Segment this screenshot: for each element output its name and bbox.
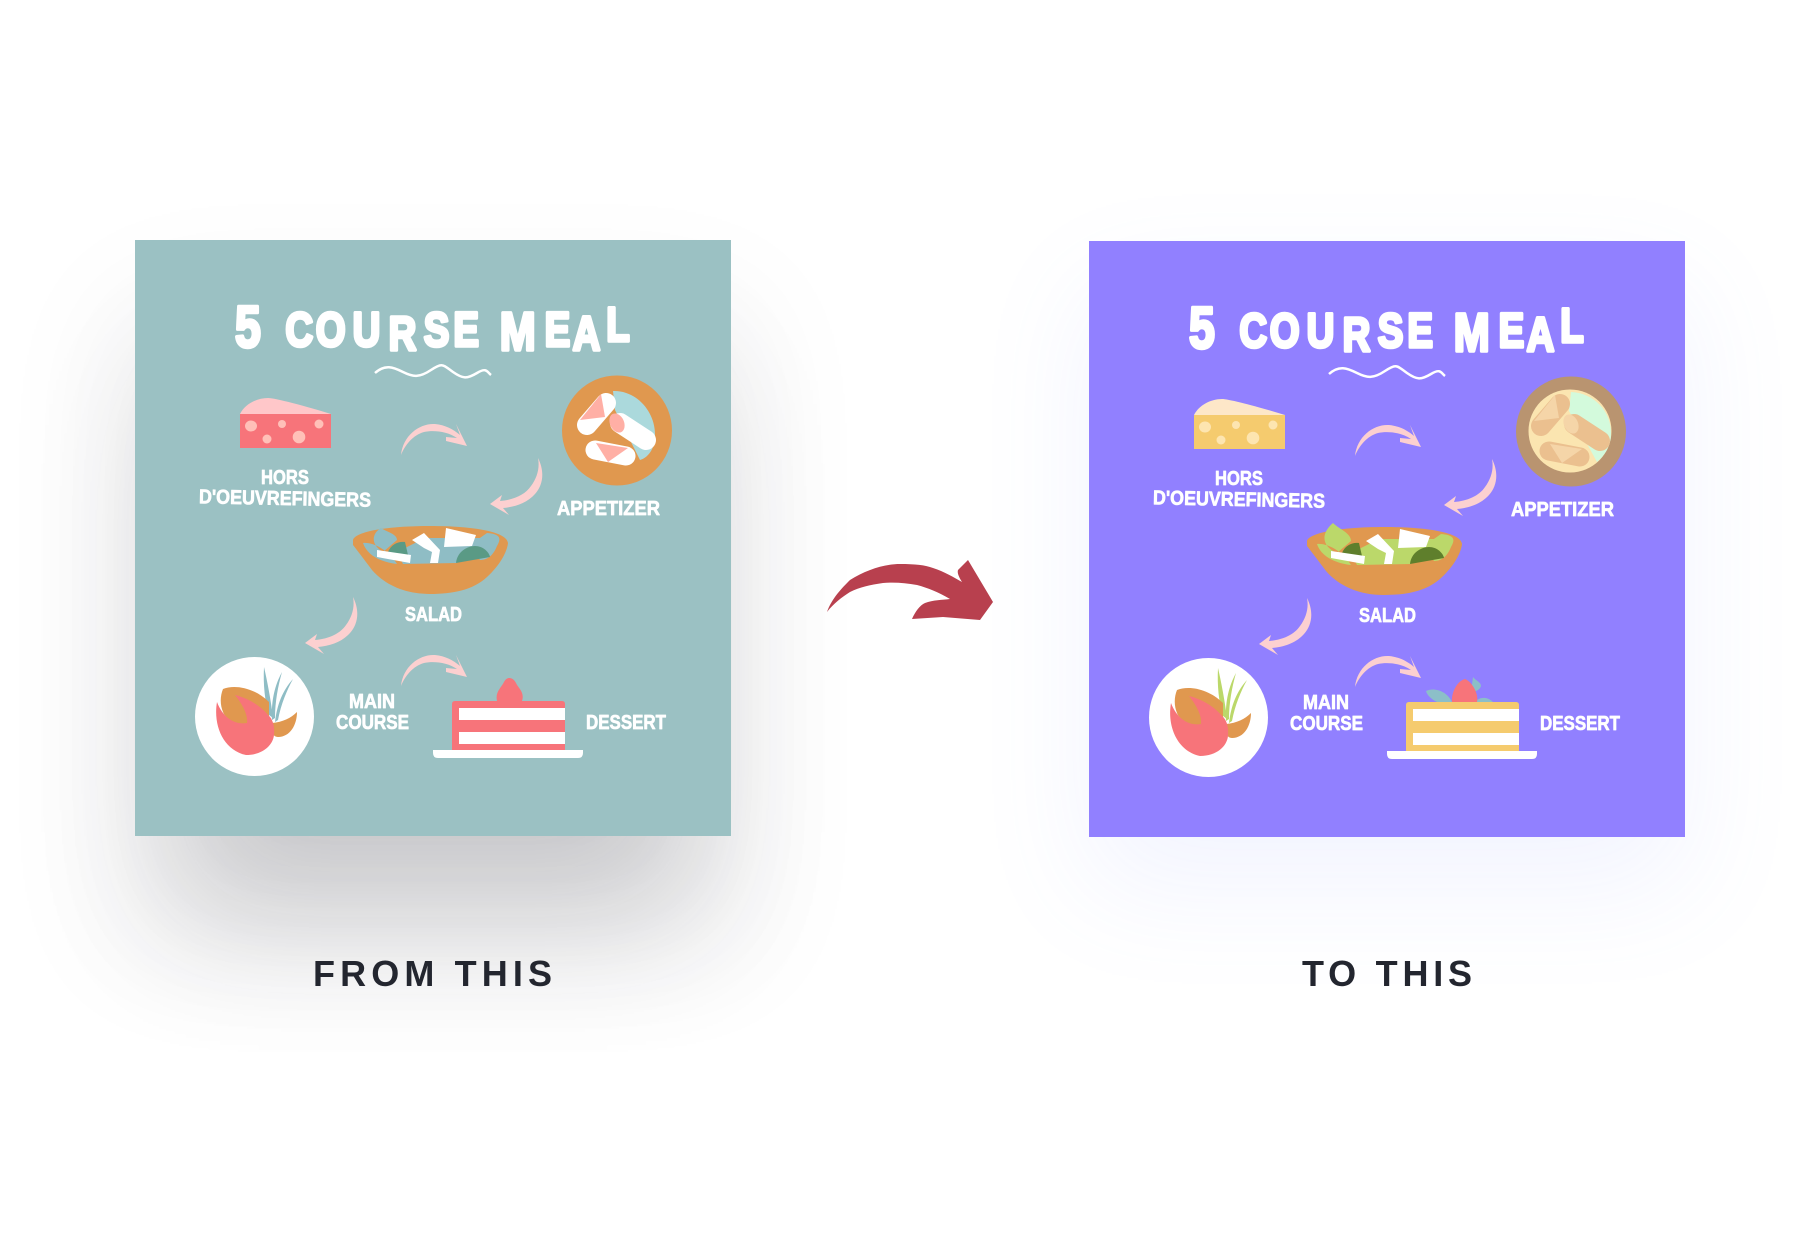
arrow: from this to this [827, 560, 993, 620]
icon: appetizer plate [1516, 376, 1626, 486]
wavy underline [375, 365, 491, 377]
label: main course [1290, 692, 1363, 735]
label: dessert: DESSERT [1540, 713, 1620, 735]
label: appetizer: APPETIZER [1511, 499, 1614, 521]
panel: to this (purple version) [1089, 241, 1685, 837]
label: hors d'oeuvrefingers: HORS [1215, 468, 1263, 490]
label: main course [336, 691, 409, 734]
arrow: cheese to appetizer [1355, 425, 1421, 456]
icon: appetizer plate [562, 376, 672, 486]
label: main course: MAIN [349, 691, 395, 713]
label: main course: MAIN [1303, 692, 1349, 714]
icon: main course plate [195, 657, 314, 776]
label: hors d'oeuvrefingers: HORS [261, 467, 309, 489]
label: salad: SALAD [1359, 605, 1416, 627]
arrow: appetizer to salad [490, 458, 542, 515]
label: hors d'oeuvrefingers: D'OEUVREFINGERS [199, 486, 371, 512]
title: 5 COURSE MEAL [235, 295, 630, 362]
arrow: main course to dessert [1355, 656, 1421, 687]
icon: cheese [240, 398, 331, 448]
label: appetizer: APPETIZER [557, 498, 660, 520]
icon: salad bowl [1307, 523, 1462, 595]
arrow: cheese to appetizer [401, 424, 467, 455]
title: 5 COURSE MEAL [1189, 296, 1584, 363]
panel: from this (teal version) [135, 240, 731, 836]
caption: to this: TO THIS [1302, 953, 1472, 994]
icon: cake with strawberry [1387, 677, 1537, 759]
label: dessert: DESSERT [586, 712, 666, 734]
wavy underline [1329, 366, 1445, 378]
panel background [1089, 241, 1685, 837]
label: main course: COURSE [336, 712, 409, 734]
icon: cheese [1194, 399, 1285, 449]
label: hors d'oeuvrefingers [1153, 468, 1325, 513]
panel background [135, 240, 731, 836]
icon: main course plate [1149, 658, 1268, 777]
arrow: salad to main course [305, 597, 357, 654]
caption: from this: FROM THIS [313, 953, 552, 994]
label: main course: COURSE [1290, 713, 1363, 735]
icon: cake [433, 678, 583, 758]
label: hors d'oeuvrefingers: D'OEUVREFINGERS [1153, 487, 1325, 513]
arrow: appetizer to salad [1444, 459, 1496, 516]
label: hors d'oeuvrefingers [199, 467, 371, 512]
label: salad: SALAD [405, 604, 462, 626]
arrow: salad to main course [1259, 598, 1311, 655]
icon: salad bowl [353, 526, 508, 594]
arrow: main course to dessert [401, 655, 467, 686]
